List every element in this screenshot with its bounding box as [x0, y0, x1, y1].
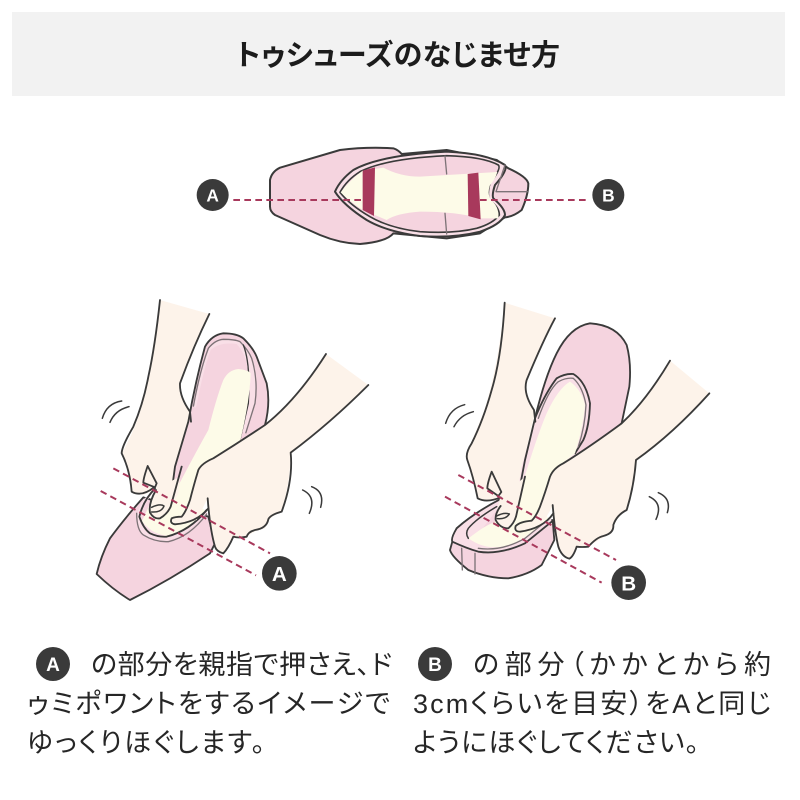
dashed guide lines B	[445, 475, 616, 583]
caption A text	[27, 650, 392, 758]
right hand A	[171, 354, 368, 553]
shoe interior	[340, 156, 499, 232]
title: トゥシューズのなじませ方	[236, 38, 560, 72]
left hand A arm	[122, 300, 209, 495]
shoe opening rim	[335, 152, 506, 237]
shoe A toe rim	[137, 490, 207, 542]
shoe B insole	[468, 382, 585, 548]
shoe B toe box	[535, 323, 630, 463]
badge B: B	[602, 185, 615, 205]
left hand B fingers	[467, 303, 555, 528]
shoe B heel rim	[452, 499, 552, 552]
shoe outer body	[270, 148, 528, 244]
caption B text: ようにほぐしてください。	[413, 728, 699, 758]
dashed guide lines A	[101, 468, 270, 575]
caption A text: ゆっくりほぐします。	[27, 728, 265, 758]
badge B: B	[621, 572, 636, 595]
caption badge A: A	[46, 655, 60, 676]
insole seam lines	[445, 156, 527, 234]
dashed line A to B	[233, 197, 588, 203]
caption A text: の部分を親指で押さえ、ド	[91, 650, 392, 680]
left hand B arm	[467, 303, 555, 502]
illustration B: hands pressing heel side	[445, 303, 709, 600]
shoe B heel seams	[462, 548, 475, 574]
shoe B heel wall	[450, 500, 554, 578]
caption B	[413, 647, 771, 758]
caption badge B: B	[428, 655, 442, 676]
caption badge A	[36, 647, 70, 681]
caption A	[27, 647, 392, 758]
shoe B side rim	[517, 374, 590, 493]
caption B text: 3cmくらいを目安）をAと同じ	[413, 689, 771, 719]
red band B	[468, 173, 481, 219]
badge B	[611, 565, 646, 600]
badge A	[197, 179, 229, 211]
title banner	[12, 12, 785, 96]
red band A	[363, 167, 375, 216]
top shoe diagram	[197, 148, 624, 244]
badge A: A	[272, 563, 287, 586]
illustration A: hands pressing toe side	[97, 300, 368, 600]
shoe A insole	[142, 369, 251, 536]
caption badge B	[418, 647, 452, 681]
shoe A heel	[173, 333, 268, 493]
caption A text: ゥミポワントをするイメージで	[27, 689, 390, 719]
insole	[341, 168, 498, 220]
badge A	[262, 556, 297, 591]
left hand A fingers	[122, 300, 209, 518]
shoe A toe box	[97, 497, 215, 600]
shoe A pink interior	[177, 343, 247, 487]
motion marks B	[446, 405, 668, 519]
motion marks A	[102, 401, 322, 513]
badge B	[592, 179, 624, 211]
right hand B	[515, 361, 709, 558]
badge A: A	[206, 185, 219, 205]
caption B text	[413, 650, 771, 758]
shoe A rim lines	[193, 339, 256, 433]
caption B text: の部分（かかとから約	[473, 650, 771, 680]
